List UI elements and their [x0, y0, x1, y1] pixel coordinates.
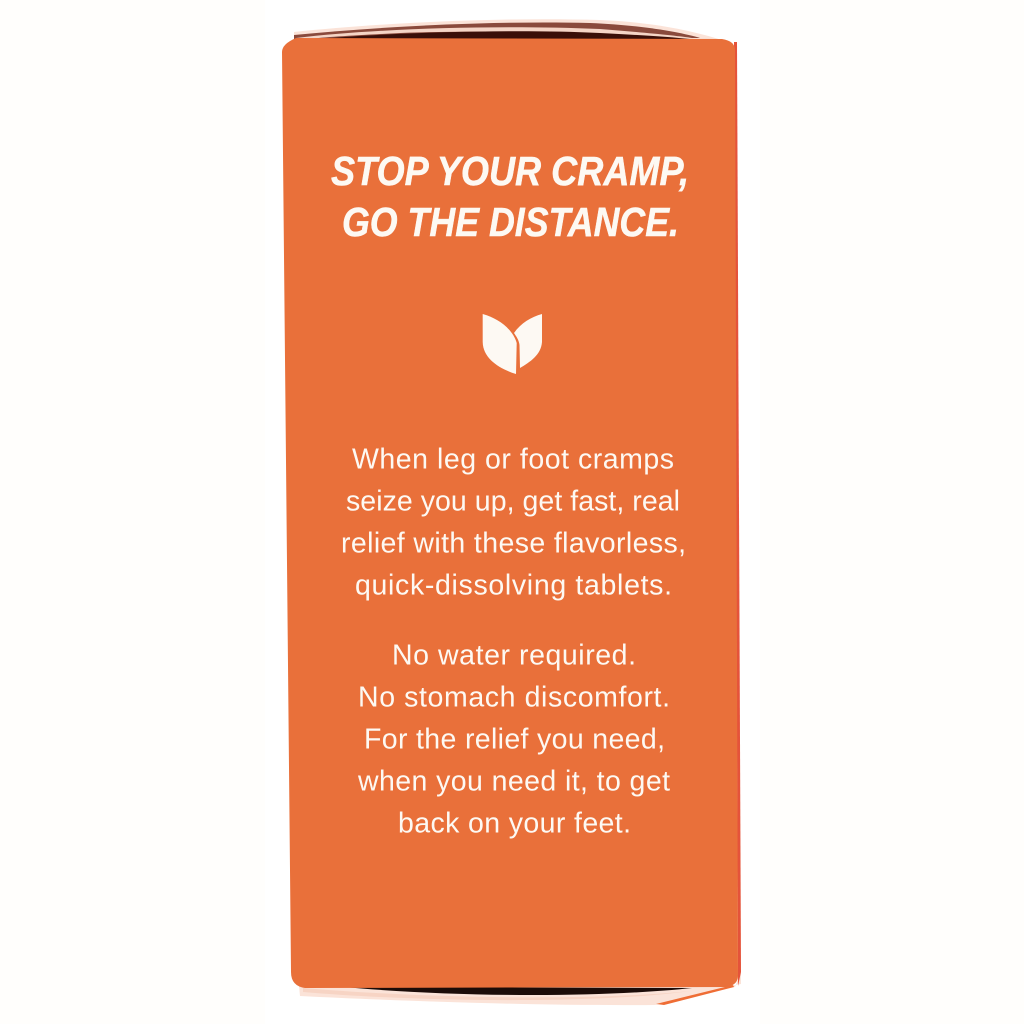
- paragraph: benefits: No stomach discomfort.: [358, 682, 670, 714]
- box side edge: [734, 42, 741, 986]
- headline: STOP YOUR CRAMP,: [331, 148, 689, 194]
- paragraph: product description: seize you up, get fast, real: [346, 486, 680, 518]
- box top flap: [294, 19, 722, 40]
- paragraph: product description: relief with these flavorless,: [341, 528, 686, 560]
- paragraph: product description: [341, 444, 686, 602]
- paragraph: benefits: [357, 640, 670, 840]
- icon: leaf logo: [483, 314, 542, 374]
- paragraph: benefits: For the relief you need,: [364, 724, 665, 756]
- paragraph: product description: quick-dissolving tablets.: [355, 570, 672, 602]
- headline: GO THE DISTANCE.: [342, 199, 679, 245]
- paragraph: product description: When leg or foot cramps: [352, 444, 674, 476]
- orange box panel: [282, 38, 738, 988]
- headline: [331, 148, 689, 245]
- box bottom flap: [299, 972, 741, 1005]
- paragraph: benefits: when you need it, to get: [357, 766, 670, 798]
- paragraph: benefits: back on your feet.: [398, 808, 631, 840]
- paragraph: benefits: No water required.: [392, 640, 636, 672]
